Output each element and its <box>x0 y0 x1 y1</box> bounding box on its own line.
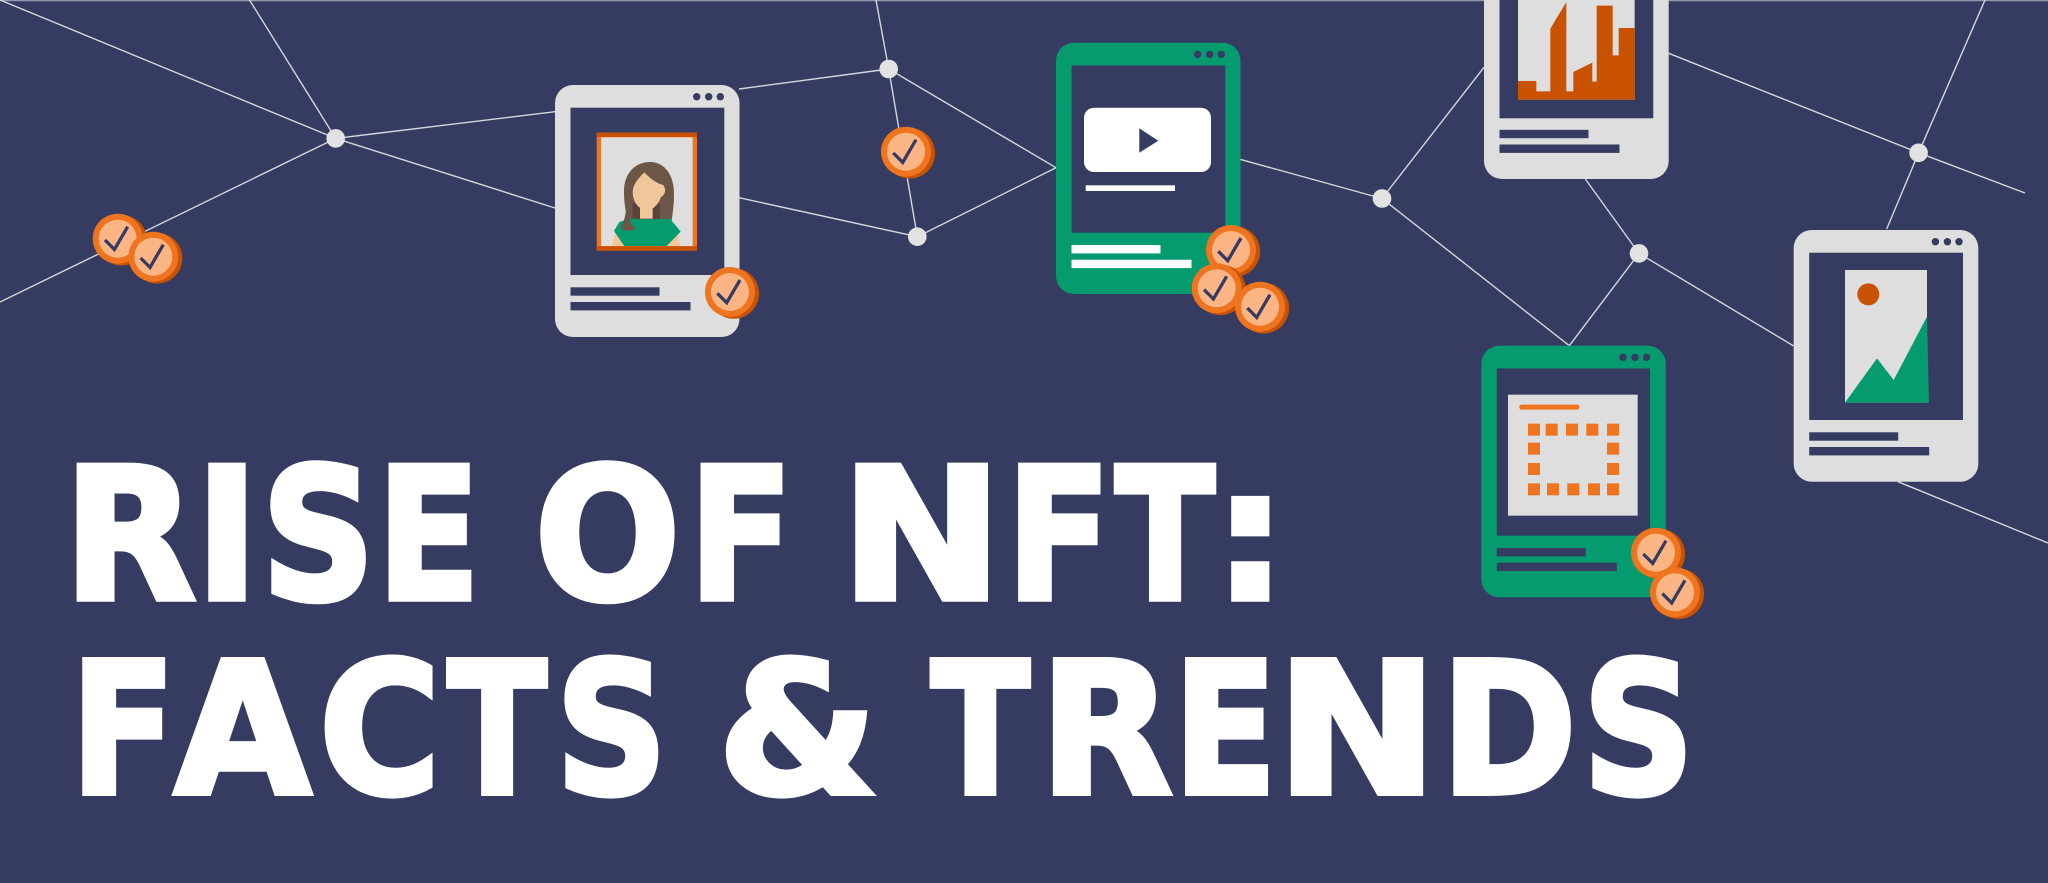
title line 2: E <box>1174 625 1277 837</box>
panel: video NFT card <box>1056 43 1240 294</box>
card screen <box>1497 368 1650 536</box>
title line 2: A <box>174 625 311 837</box>
caption bars <box>1809 432 1929 455</box>
portrait of woman <box>597 133 697 251</box>
card body <box>1056 43 1240 294</box>
chart picture <box>1518 0 1635 100</box>
title line 1: E <box>377 431 480 643</box>
network lines <box>0 0 2048 543</box>
title line 1: T <box>1115 431 1215 643</box>
panel: landscape NFT card <box>1794 230 1978 482</box>
card body <box>1481 346 1666 597</box>
title line 2: T <box>448 625 547 837</box>
title line 1: : <box>1214 431 1287 643</box>
pixel art <box>1508 395 1638 516</box>
title line 1: O <box>535 431 680 643</box>
caption bars <box>1072 245 1192 268</box>
card screen <box>570 108 724 275</box>
title line 2: T <box>931 625 1030 837</box>
verified coins <box>93 127 1704 619</box>
title line 2: & <box>718 625 878 837</box>
caption bars <box>1500 130 1620 153</box>
title line 1: N <box>841 431 1003 643</box>
landscape picture <box>1845 270 1929 403</box>
caption bars <box>570 287 690 310</box>
network nodes <box>326 60 1928 263</box>
panel: pixel art NFT card <box>1481 346 1666 597</box>
window dots <box>693 93 724 100</box>
play icon <box>1139 128 1158 153</box>
title line 1: S <box>262 431 375 643</box>
window dots <box>1619 354 1650 361</box>
panel: chart NFT card <box>1484 0 1669 179</box>
title line 2: D <box>1441 625 1577 837</box>
title <box>64 431 1694 837</box>
window dots <box>1194 51 1225 58</box>
video player <box>1084 108 1211 172</box>
title line 1: R <box>64 431 196 643</box>
card body <box>1794 230 1978 482</box>
title line 2: F <box>71 625 176 837</box>
title line 2: R <box>1040 625 1172 837</box>
card screen <box>1500 0 1653 118</box>
title line 2: S <box>556 625 667 837</box>
window dots <box>1932 238 1963 245</box>
panel: portrait NFT card <box>555 85 740 337</box>
title line 2: C <box>319 625 440 837</box>
card screen <box>1072 65 1225 233</box>
caption bars <box>1497 548 1617 571</box>
card body <box>1484 0 1669 179</box>
title line 1: F <box>689 431 793 643</box>
title line 2: N <box>1276 625 1438 837</box>
video title bar <box>1086 185 1175 191</box>
title line 1: I <box>196 431 258 643</box>
card body <box>555 85 740 337</box>
card screen <box>1809 253 1963 420</box>
title line 1: F <box>1007 431 1111 643</box>
title line 2: S <box>1583 625 1694 837</box>
